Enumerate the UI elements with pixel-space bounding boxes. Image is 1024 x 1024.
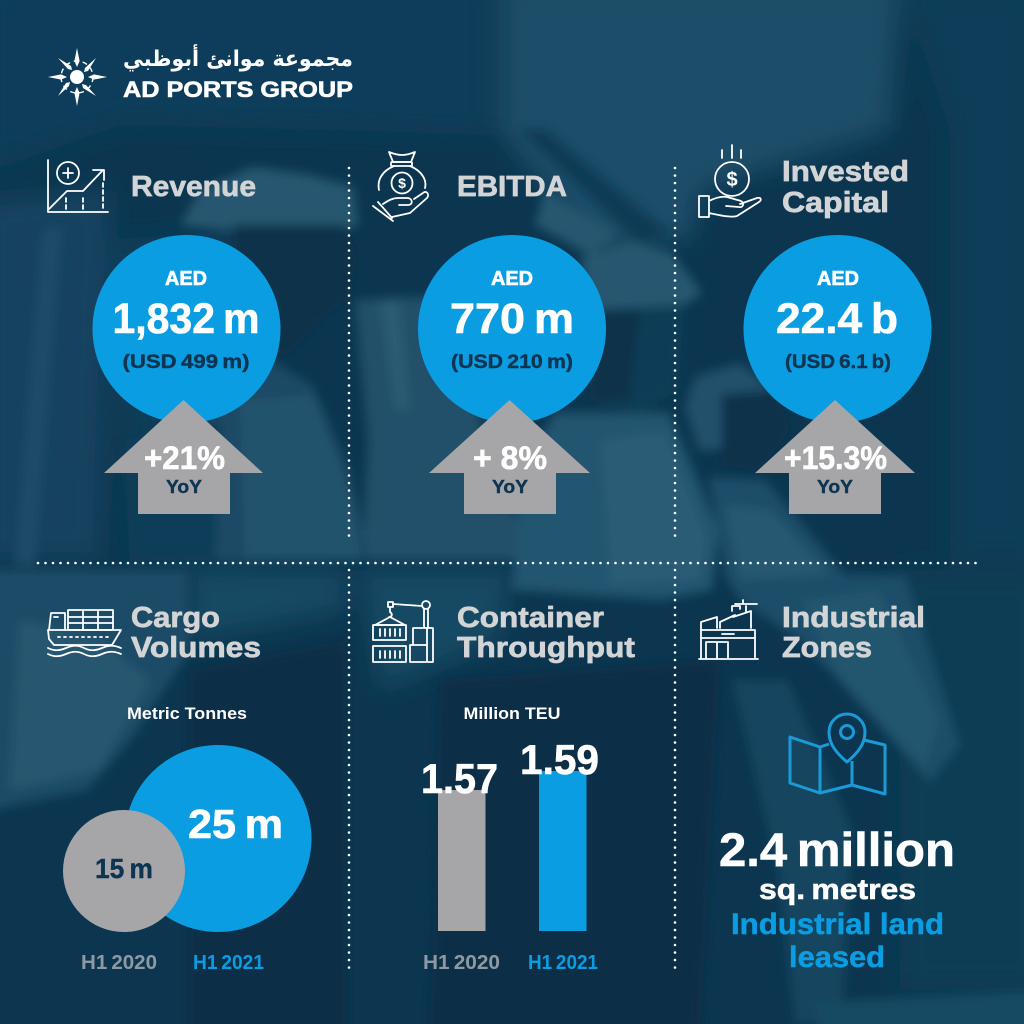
unit label: Metric Tonnes [127,704,247,723]
unit label: Million TEU [464,704,560,723]
key figure: 2.4 million [719,823,955,876]
lower dark body [430,660,720,1024]
growth arrow: YoY [492,477,528,497]
logotype: AD PORTS GROUP [123,77,353,102]
revenue circle: (USD 499 m) [122,351,250,373]
panel: invested capital [699,145,932,514]
ebitda circle [418,235,606,423]
arabic logotype: مجموعة موانئ أبوظبي [123,43,353,72]
icon: compass star [48,48,107,106]
heading: Cargo [131,602,220,634]
panel behind left worker [355,295,530,560]
bubble chart: 15 m [95,853,153,884]
heading: Industrial [782,602,925,634]
capital circle [744,235,932,423]
panel: cargo volumes [48,602,312,974]
period labels [423,952,598,974]
icon: coin above hand [699,145,761,217]
growth arrow: YoY [817,477,853,497]
dotted dividers [38,168,980,972]
key figure: leased [789,941,885,974]
icon: factory [699,600,758,659]
icon: coin above hand: $ [726,169,738,191]
growth arrow: +15.3% [784,440,887,476]
growth arrow [104,400,263,514]
period labels: H1 2021 [193,952,264,974]
icon: container crane [373,601,433,662]
bar chart [421,736,599,931]
capital circle: AED [817,268,859,290]
panel: industrial zones [699,600,955,974]
bubble chart: 25 m [188,801,283,847]
middle worker helmet [582,240,702,315]
heading: Container [457,602,604,634]
ebitda circle: 770 m [450,295,574,343]
growth arrow: + 8% [473,440,547,476]
middle worker face [590,305,684,412]
period labels: H1 2020 [81,952,157,974]
panel: cargo volumes: Volumes [131,632,261,664]
beam [520,130,668,245]
left worker torso [150,360,370,560]
icon: map with pin [790,714,885,794]
capital circle: 22.4 b [776,295,898,343]
key figure [719,823,955,974]
revenue circle [92,235,280,423]
revenue circle: AED [165,268,207,290]
icon: money bag on hand [373,152,428,221]
icon: money bag on hand: $ [398,175,406,191]
period labels [81,952,264,974]
panel: industrial zones: Zones [782,632,872,664]
panel: container throughput: Throughput [457,632,635,664]
growth arrow [755,400,915,514]
panel: invested capital: Capital [782,187,889,219]
panel: ebitda [373,152,606,514]
key figure: sq. metres [759,874,916,906]
right worker [685,363,772,450]
growth arrow [429,400,590,514]
heading: EBITDA [457,171,567,203]
ebitda circle: (USD 210 m) [451,351,573,373]
revenue circle: 1,832 m [112,295,260,343]
heading: Invested [782,156,909,188]
capital circle: (USD 6.1 b) [785,351,891,373]
panel: revenue [48,160,280,514]
growth arrow: YoY [166,477,202,497]
middle worker torso [512,413,719,600]
left worker helmet [180,167,358,232]
bar chart: 1.57 [421,755,498,802]
period labels: H1 2021 [528,952,598,974]
panel: container throughput [373,601,635,974]
machine lower left [0,570,190,810]
growth arrow: +21% [144,440,225,476]
post left [15,225,62,565]
logo [48,43,353,106]
left worker face [233,225,357,358]
icon: growth chart [48,160,108,212]
heading: Revenue [131,171,256,203]
bubble chart [63,745,312,932]
period labels: H1 2020 [423,952,500,974]
bar chart: 1.59 [520,736,599,783]
icon: cargo ship [48,610,121,656]
key figure: Industrial land [731,908,944,941]
ebitda circle: AED [491,268,533,290]
